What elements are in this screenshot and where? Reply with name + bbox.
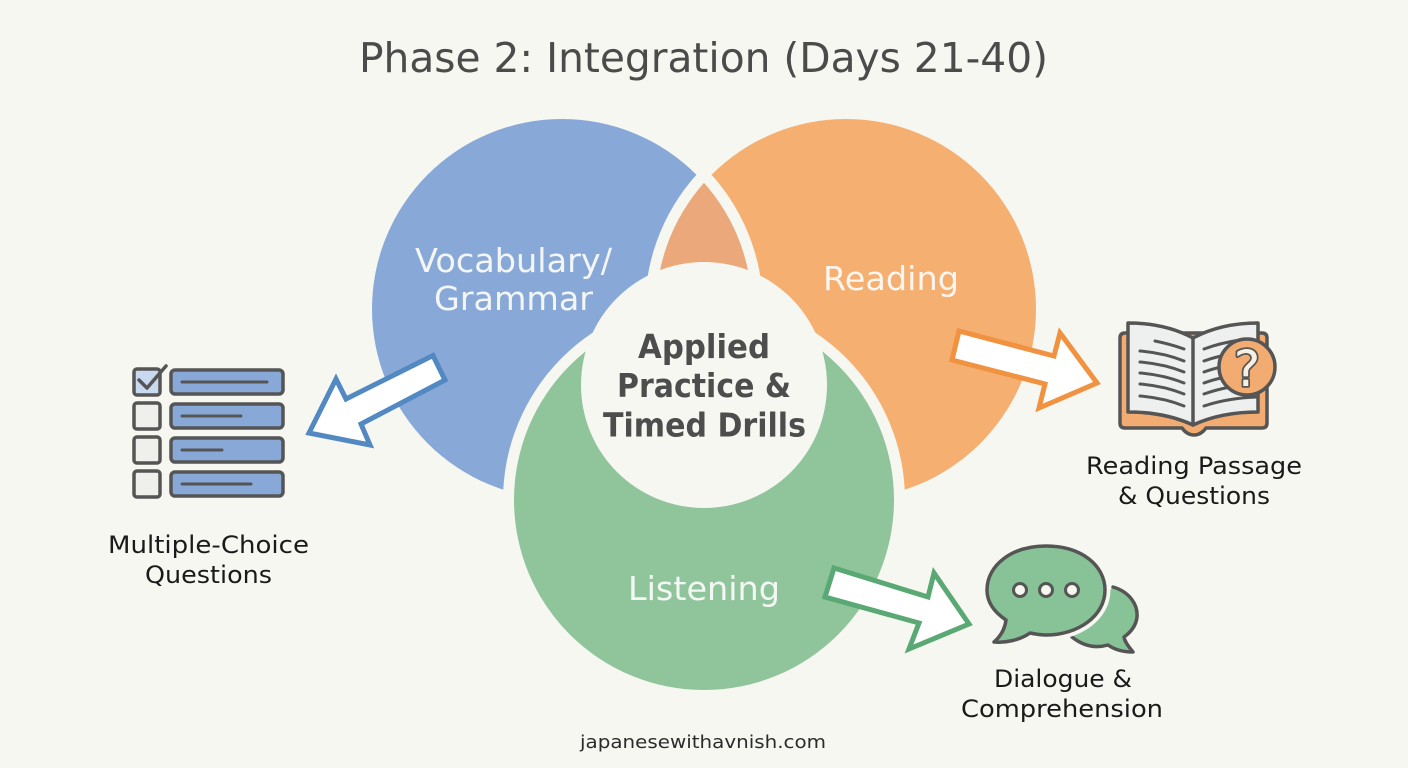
label: dialogue and comprehension: Dialogue &	[994, 665, 1132, 693]
icon: open book with question mark	[1120, 323, 1275, 435]
arrow: green to dialogue	[825, 568, 969, 649]
center text: Practice &	[617, 366, 791, 405]
circle: reading	[712, 119, 1036, 490]
label: vocabulary/grammar: Grammar	[434, 279, 593, 318]
label: reading: Reading	[823, 259, 959, 298]
icon: speech bubbles	[987, 546, 1137, 652]
label: listening: Listening	[628, 569, 780, 608]
circle: listening	[514, 310, 894, 690]
footer url: japanesewithavnish.com	[579, 732, 826, 753]
label: multiple-choice questions: Questions	[145, 561, 272, 589]
circle: vocabulary/grammar	[372, 119, 696, 490]
book pages	[1128, 323, 1258, 425]
answer bars	[171, 370, 283, 496]
label: vocabulary/grammar: Vocabulary/	[415, 241, 613, 280]
gap ring around green circle	[503, 299, 905, 701]
book cover	[1120, 333, 1267, 435]
label: vocabulary/grammar	[415, 241, 613, 318]
large speech bubble	[987, 546, 1105, 642]
label: multiple-choice questions	[108, 531, 309, 589]
label: dialogue and comprehension: Comprehension	[961, 695, 1163, 723]
label: dialogue and comprehension	[961, 665, 1163, 723]
gap between bubbles	[987, 546, 1105, 635]
text lines on pages	[1140, 340, 1257, 406]
center text: Timed Drills	[603, 406, 806, 444]
question badge	[1219, 339, 1275, 395]
arrow: blue to multiple-choice	[309, 356, 445, 445]
label: reading passage and questions: & Questions	[1118, 482, 1270, 510]
checkbox 1 checked	[134, 366, 166, 395]
label: multiple-choice questions: Multiple-Choice	[108, 531, 309, 559]
center text	[603, 327, 806, 444]
venn diagram	[372, 119, 1036, 701]
answer bar lines	[182, 382, 267, 484]
ellipsis dots	[1014, 584, 1078, 596]
question mark: ?	[1234, 340, 1260, 398]
title: Phase 2: Integration (Days 21-40)	[359, 34, 1048, 82]
label: reading passage and questions: Reading Passage	[1086, 452, 1302, 480]
center text: Applied	[638, 327, 770, 366]
overlap: blue and orange lens	[660, 182, 748, 270]
icon: multiple-choice checklist	[134, 366, 283, 497]
small speech bubble	[1072, 587, 1137, 652]
arrow: orange to reading passage	[952, 331, 1097, 408]
center circle	[581, 262, 827, 508]
label: reading passage and questions	[1086, 452, 1302, 510]
checkboxes empty	[134, 403, 160, 497]
